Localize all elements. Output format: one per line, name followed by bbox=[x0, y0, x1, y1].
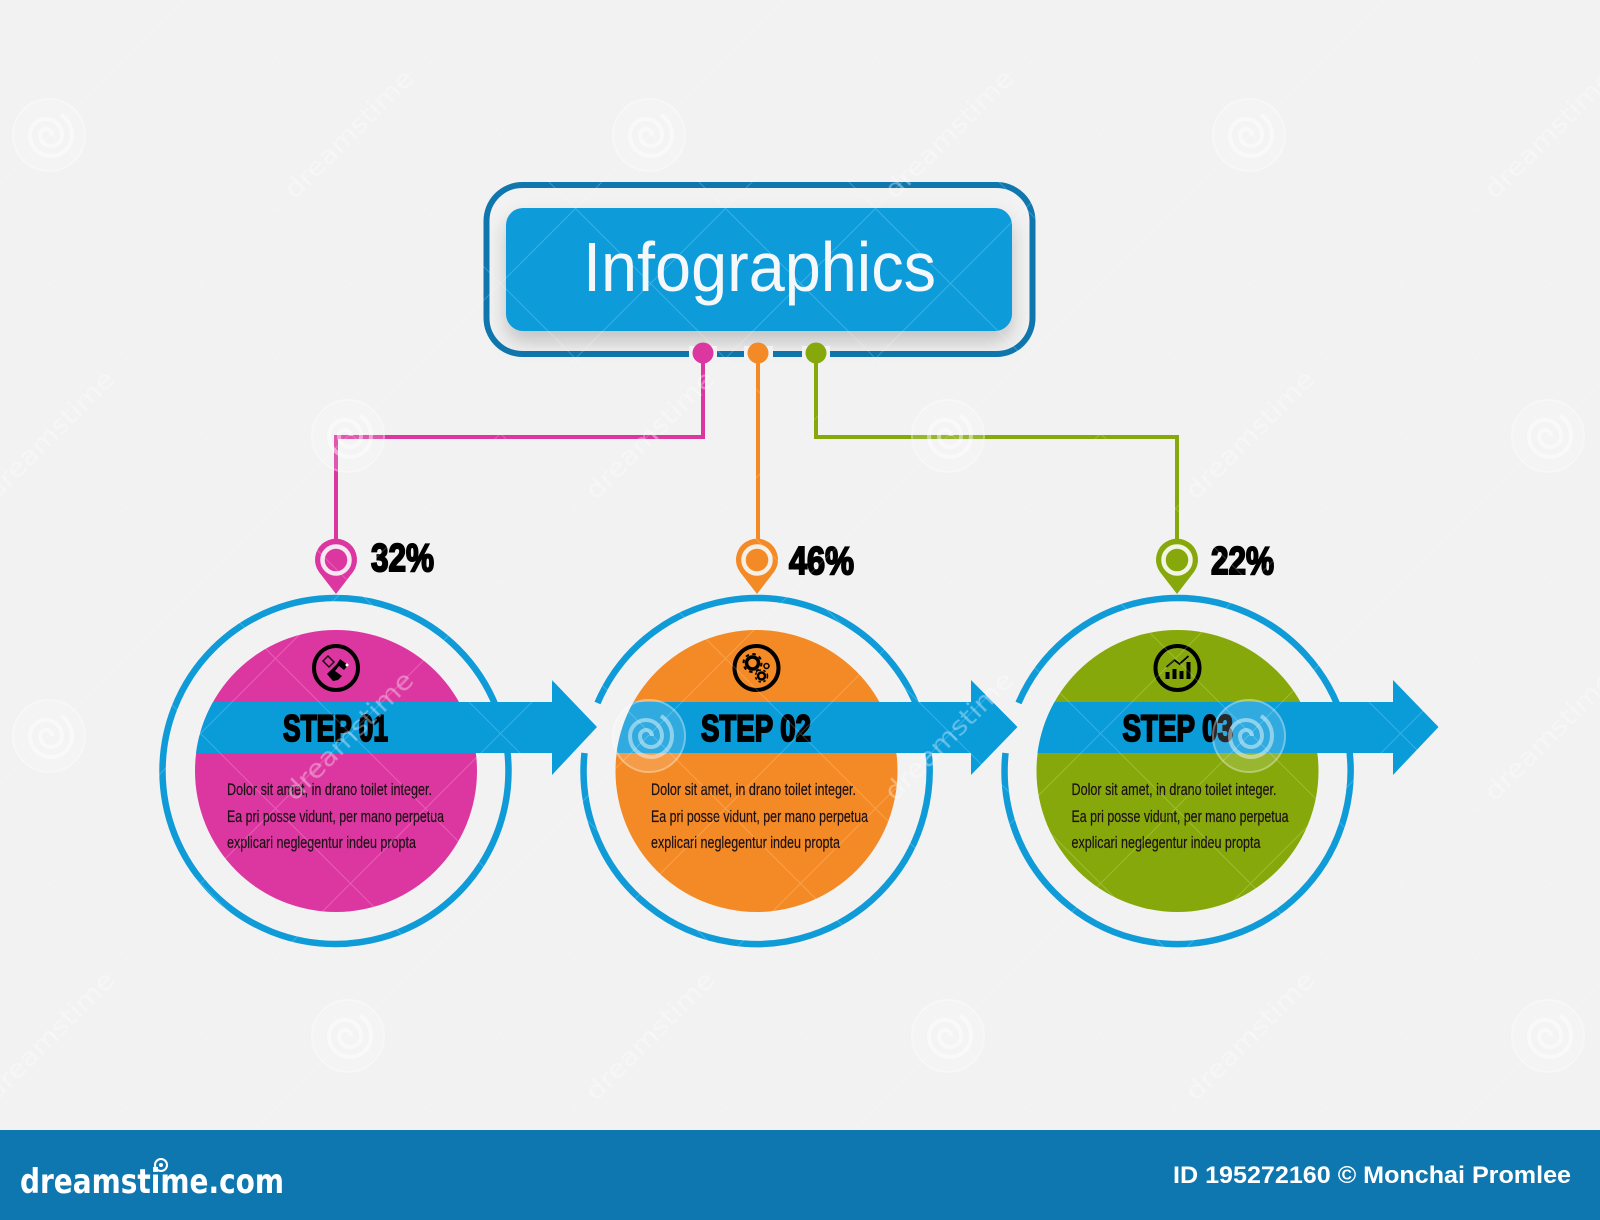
watermark overlay: dreamstime bbox=[1180, 365, 1321, 506]
footer logo: dreamstime.com bbox=[20, 1162, 284, 1202]
panel: step 03 bbox=[1005, 539, 1438, 944]
outer ring 3 bbox=[1005, 598, 1351, 944]
inner circle 3 bbox=[1036, 630, 1318, 912]
pin 2 bbox=[736, 539, 778, 594]
watermark overlay: dreamstime bbox=[580, 365, 721, 506]
body text 3: Dolor sit amet, in drano toilet integer. bbox=[1072, 780, 1276, 799]
pin 1 bbox=[315, 539, 357, 594]
connector: pink line bbox=[336, 342, 717, 545]
body text 1: Dolor sit amet, in drano toilet integer. bbox=[227, 780, 432, 799]
watermark overlay: dreamstime bbox=[279, 64, 420, 205]
title outer frame bbox=[486, 185, 1032, 354]
watermark overlay: dreamstime bbox=[279, 666, 420, 807]
percentage 46%: 46% bbox=[789, 540, 854, 583]
body text 3 bbox=[1072, 780, 1289, 852]
title text: Infographics bbox=[583, 228, 936, 306]
percentage 22%: 22% bbox=[1211, 540, 1274, 583]
body text 3: explicari neglegentur indeu propta bbox=[1072, 833, 1261, 852]
footer bar bbox=[0, 1130, 1600, 1220]
outer ring 2 bbox=[584, 598, 930, 944]
watermark overlay: dreamstime bbox=[580, 966, 721, 1107]
pin 3 bbox=[1156, 539, 1198, 594]
percentage 32%: 32% bbox=[371, 537, 434, 580]
connector: orange line bbox=[744, 342, 773, 545]
icon: gears bbox=[734, 646, 778, 690]
inner circle 2 bbox=[616, 630, 898, 912]
step label 03: STEP 03 bbox=[1122, 708, 1233, 749]
arrow 3 bbox=[1038, 680, 1438, 775]
body text 1: explicari neglegentur indeu propta bbox=[227, 833, 416, 852]
title box bbox=[486, 185, 1032, 354]
arrow 2 bbox=[616, 680, 1018, 775]
arrow 1 bbox=[196, 680, 597, 775]
step label 01: STEP 01 bbox=[283, 708, 388, 749]
connector: green line bbox=[802, 342, 1177, 545]
body text 2: explicari neglegentur indeu propta bbox=[651, 833, 840, 852]
inner circle 1 bbox=[195, 630, 477, 912]
body text 1: Ea pri posse vidunt, per mano perpetua bbox=[227, 807, 444, 826]
panel: step 01 bbox=[162, 537, 597, 944]
watermark overlay: dreamstime bbox=[879, 666, 1020, 807]
body text 2: Dolor sit amet, in drano toilet integer. bbox=[651, 780, 856, 799]
footer credit: ID 195272160 © Monchai Promlee bbox=[1173, 1162, 1571, 1189]
body text 3: Ea pri posse vidunt, per mano perpetua bbox=[1072, 807, 1289, 826]
icon: bar chart bbox=[1156, 646, 1200, 690]
body text 2: Ea pri posse vidunt, per mano perpetua bbox=[651, 807, 868, 826]
body text 1 bbox=[227, 780, 444, 852]
title inner panel bbox=[506, 208, 1012, 331]
watermark overlay: dreamstime bbox=[1180, 966, 1321, 1107]
watermark overlay: dreamstime bbox=[879, 64, 1020, 205]
icon: handshake bbox=[314, 646, 358, 690]
step label 02: STEP 02 bbox=[701, 708, 811, 749]
outer ring 1 bbox=[162, 598, 508, 944]
panel: step 02 bbox=[584, 539, 1018, 944]
body text 2 bbox=[651, 780, 868, 852]
